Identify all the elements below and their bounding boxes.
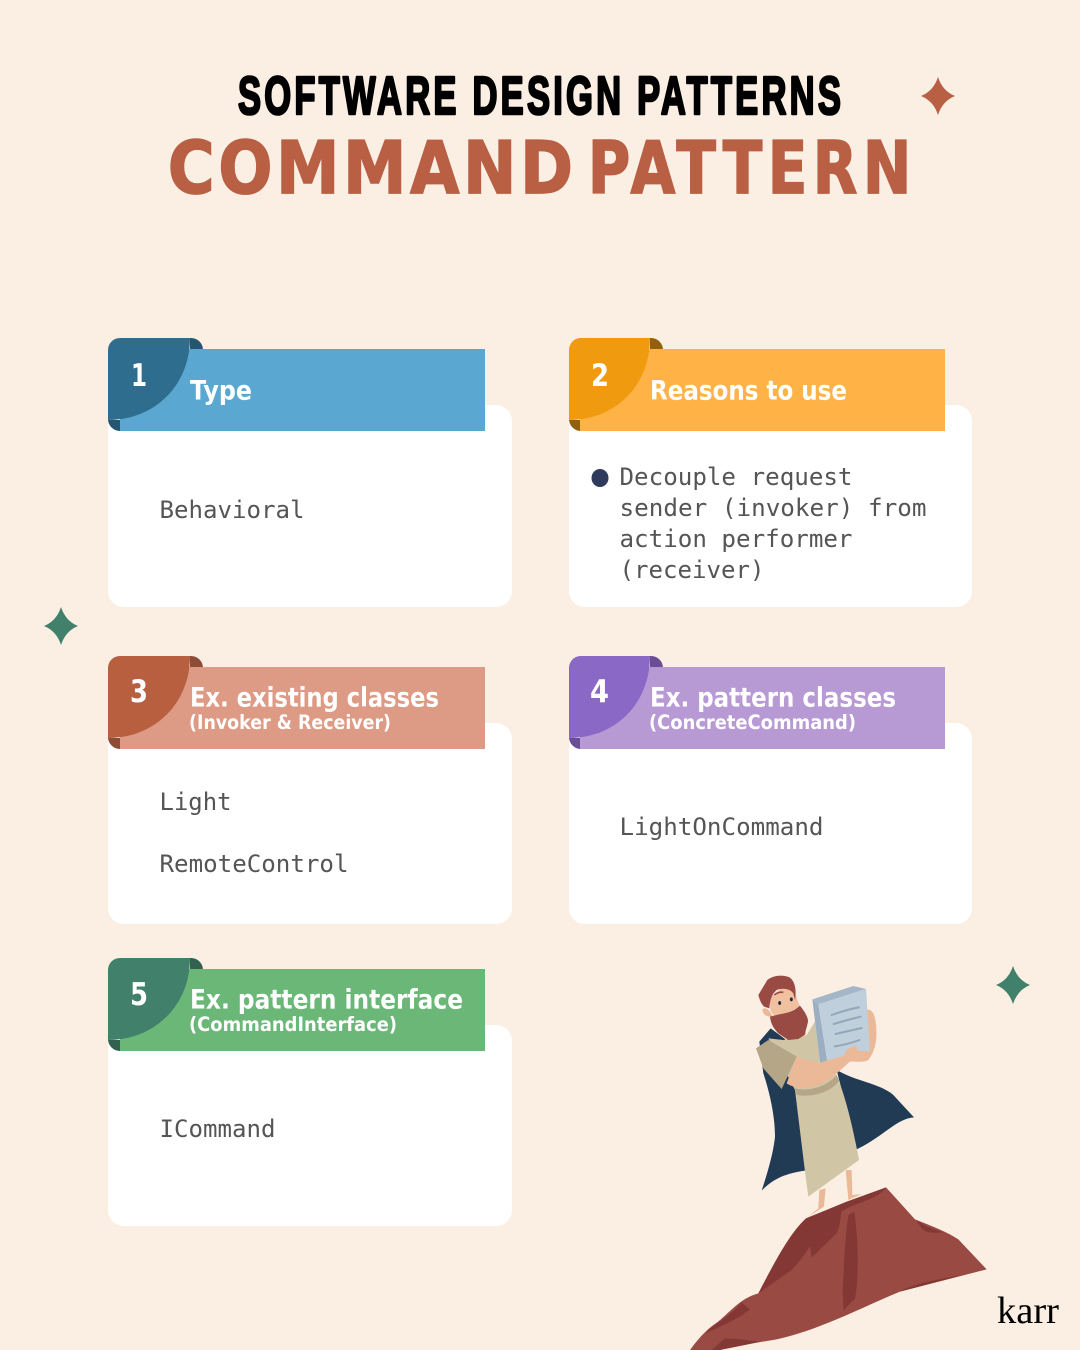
title: command pattern (168, 126, 911, 211)
panel: reasons to use: action performer (620, 525, 852, 553)
panel: reasons to use: Reasons to use (650, 376, 847, 406)
panel: reasons to use: 2 (591, 358, 609, 394)
panel: existing classes: Ex. existing classes (190, 682, 439, 714)
panel: existing classes: (Invoker & Receiver) (189, 711, 391, 734)
upper body detail (758, 976, 876, 1088)
icon: orange sparkle (921, 77, 955, 115)
brows (774, 989, 794, 995)
panel: pattern interface: 5 (130, 977, 148, 1013)
tablet (812, 986, 870, 1063)
panel: pattern classes: 4 (590, 674, 609, 710)
panel: pattern interface: ICommand (160, 1115, 276, 1143)
panel: type (108, 338, 512, 607)
icon: green sparkle right (996, 966, 1030, 1004)
cape (759, 1028, 914, 1191)
panel: type: 1 (131, 358, 147, 394)
panel: reasons to use (569, 338, 972, 607)
panel: pattern interface: (CommandInterface) (189, 1013, 397, 1036)
logo: karr: karr (997, 1290, 1059, 1332)
beard (770, 1006, 808, 1040)
face (769, 987, 800, 1018)
panel: pattern interface: Ex. pattern interface (190, 984, 463, 1016)
far hand (866, 1010, 876, 1060)
title: command pattern: COMMAND (168, 126, 573, 210)
panel: pattern classes: LightOnCommand (620, 813, 824, 841)
title: software design patterns: SOFTWARE DESIGN PATTERNS (238, 65, 841, 126)
panel: pattern classes: Ex. pattern classes (650, 682, 896, 714)
panel: reasons to use: (receiver) (620, 556, 764, 584)
arm (787, 1045, 870, 1088)
eyes (778, 997, 793, 1005)
illustration: bearded man holding stone tablet on a mountain (690, 976, 987, 1350)
panel: pattern classes (569, 656, 972, 924)
icon: green sparkle left (44, 607, 78, 645)
panel: existing classes: Light (160, 788, 232, 816)
panel: reasons to use: Decouple request (620, 463, 852, 491)
panel: existing classes: RemoteControl (160, 850, 348, 878)
title: command pattern: PATTERN (588, 127, 911, 211)
panel: pattern interface (108, 958, 512, 1226)
sleeve and shade (756, 1040, 839, 1096)
panel: reasons to use: sender (invoker) from (620, 494, 926, 522)
panel: pattern classes: (ConcreteCommand) (649, 711, 856, 734)
hair (758, 976, 796, 1008)
panel: type: Type (190, 376, 252, 406)
robe (768, 1022, 859, 1197)
panel: existing classes: 3 (130, 674, 148, 710)
panel: existing classes (108, 656, 512, 924)
panel: type: Behavioral (160, 496, 304, 524)
ear (763, 1008, 773, 1017)
mountain and legs (690, 1170, 987, 1350)
